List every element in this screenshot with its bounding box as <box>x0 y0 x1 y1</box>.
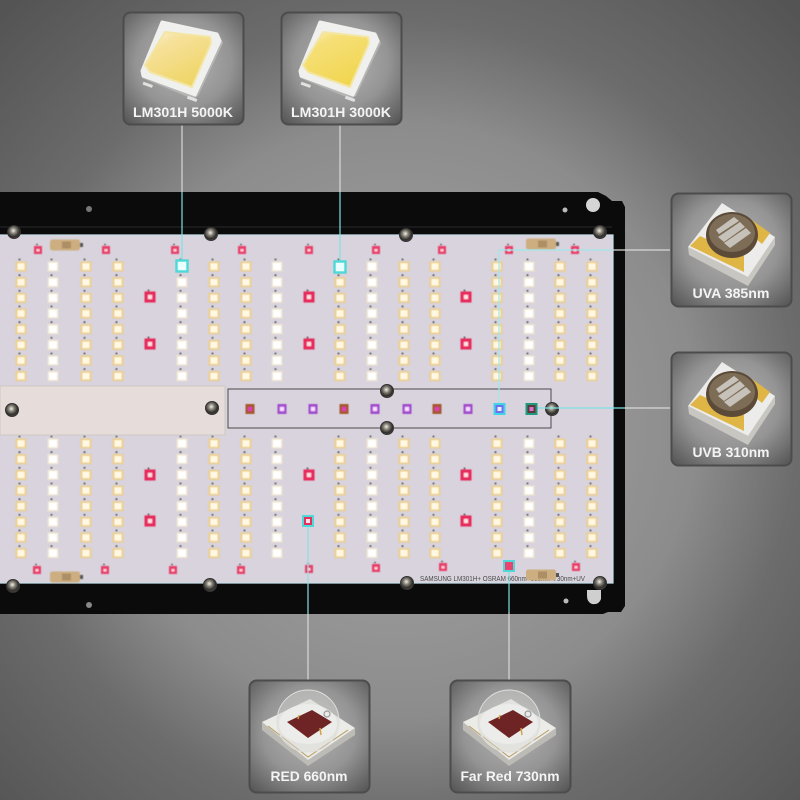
board print text: SAMSUNG LM301H+ OSRAM 660nm+385nm+730nm+UV <box>420 576 585 583</box>
card: RED 660nm <box>250 680 370 792</box>
callout line: UVA 385nm <box>494 250 670 414</box>
callout line: UVB 310nm <box>526 404 670 414</box>
white cover strip <box>0 386 225 435</box>
callout line: LM301H 5000K <box>176 124 188 272</box>
white LED array, upper and lower <box>16 259 598 558</box>
connectors <box>50 238 559 582</box>
UV strip <box>228 389 551 428</box>
label: Far Red 730nm <box>460 768 560 784</box>
callout line: Far Red 730nm <box>504 561 514 680</box>
callout line: LM301H 3000K <box>334 124 346 272</box>
card: Far Red 730nm <box>450 680 570 792</box>
label: LM301H 3000K <box>291 104 391 120</box>
callout line: RED 660nm <box>303 516 313 680</box>
icon: red LED chip <box>262 690 355 766</box>
LED circuit board <box>0 226 613 592</box>
icon: UVA LED chip <box>688 203 775 286</box>
screws <box>6 226 606 592</box>
card: LM301H 5000K <box>124 12 244 124</box>
card: LM301H 3000K <box>282 12 402 124</box>
connector over print <box>526 570 559 580</box>
icon: white LED chip 5000K <box>142 22 223 102</box>
icon: white LED chip 3000K <box>300 22 381 102</box>
red LEDs <box>33 244 580 574</box>
black fixture frame <box>0 192 625 614</box>
label: LM301H 5000K <box>133 104 233 120</box>
label: UVA 385nm <box>692 285 770 301</box>
icon: UVB LED chip <box>688 362 775 445</box>
label: UVB 310nm <box>692 444 770 460</box>
icon: far red LED chip <box>463 690 556 766</box>
card: UVB 310nm <box>672 352 792 466</box>
card: UVA 385nm <box>672 194 792 306</box>
label: RED 660nm <box>270 768 348 784</box>
